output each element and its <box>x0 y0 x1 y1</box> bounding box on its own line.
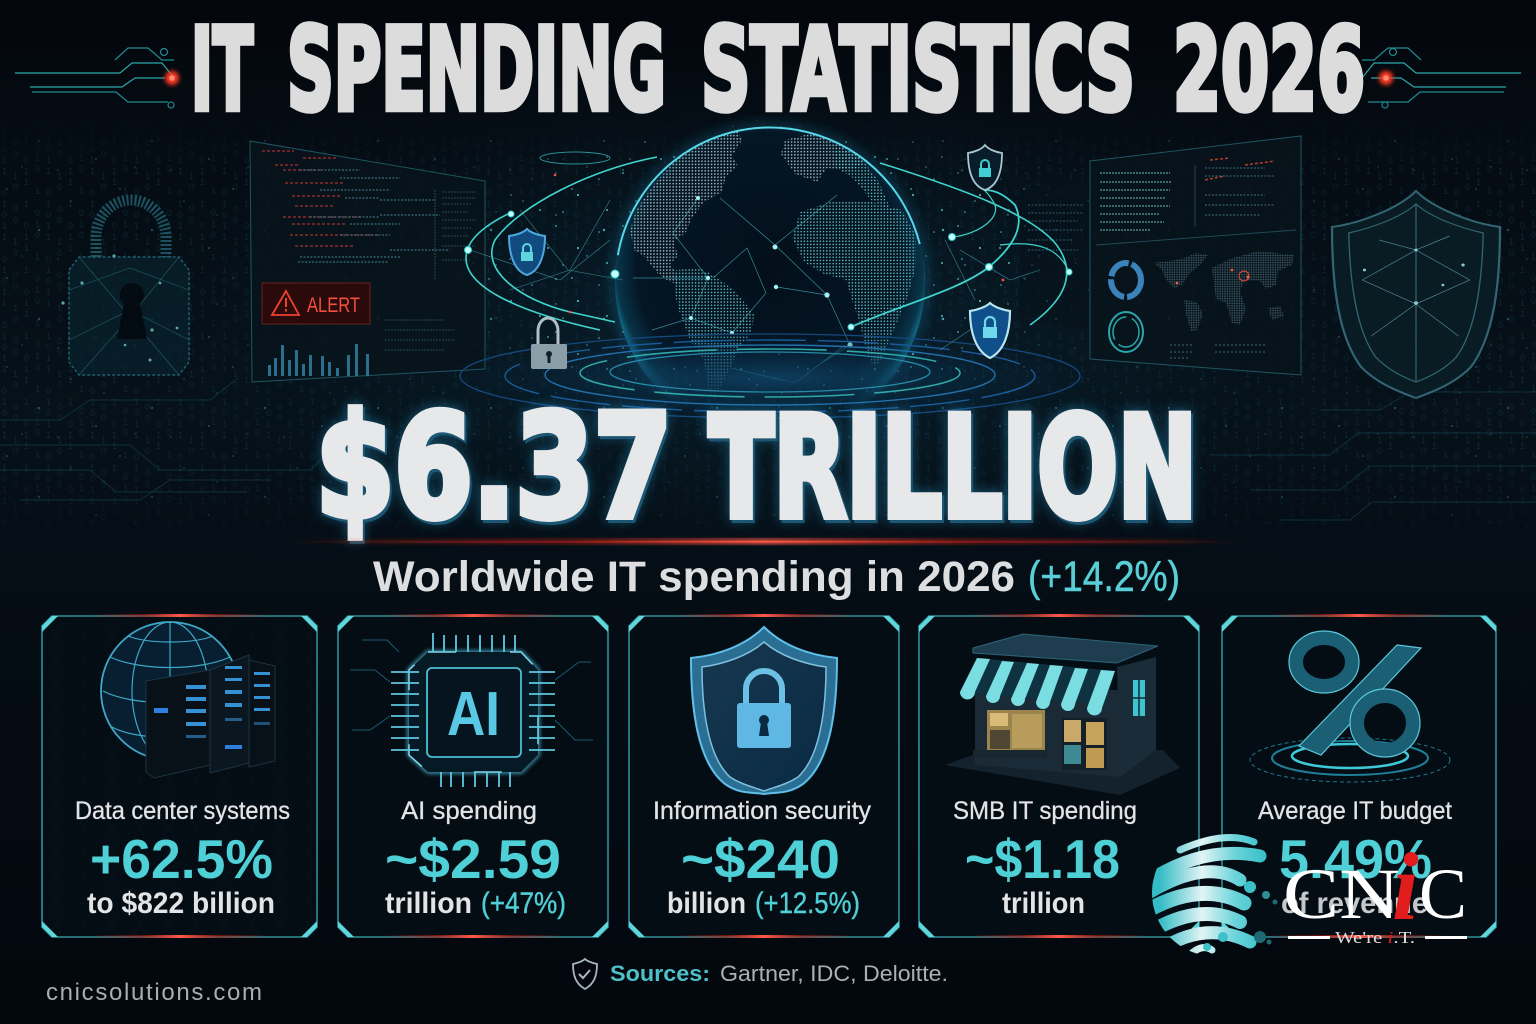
network lines <box>615 194 925 384</box>
website: cnicsolutions.com <box>46 979 262 1006</box>
icon: AI chip: AI <box>447 680 500 749</box>
headline figure: $6.37 <box>318 388 674 553</box>
donut gauge <box>1111 263 1141 297</box>
orbit rings <box>464 152 1072 350</box>
card: information security: ~$240 <box>681 828 840 890</box>
logo tagline <box>1288 928 1467 947</box>
logo sphere <box>1145 838 1278 960</box>
icon: shop front <box>945 634 1180 795</box>
headline figure: TRILLION <box>711 390 1199 552</box>
red divider glow <box>290 539 1240 544</box>
card: data center systems <box>42 614 317 938</box>
card: information security <box>629 614 899 938</box>
greenland / europe <box>781 134 866 182</box>
background shield icon <box>1332 191 1500 398</box>
card: AI spending: (+47%) <box>481 887 566 920</box>
mini bar chart <box>268 344 369 376</box>
card: information security: billion <box>667 887 746 920</box>
icon: shield with padlock <box>691 627 837 794</box>
small shield icon: bottom <box>970 303 1010 358</box>
title ornament: right circuit <box>1362 48 1521 108</box>
card: data center systems: +62.5% <box>90 828 273 890</box>
card: average IT budget: 5.49% <box>1279 828 1432 890</box>
alert badge <box>262 283 370 324</box>
dark world map <box>1154 251 1294 331</box>
icon: check shield <box>573 959 597 989</box>
africa <box>792 202 916 366</box>
card: SMB IT spending: trillion <box>1002 887 1085 920</box>
card: information security: (+12.5%) <box>755 887 860 920</box>
card: average IT budget: Average IT budget <box>1258 797 1452 825</box>
card: AI spending: AI spending <box>401 797 537 825</box>
title <box>191 4 1365 136</box>
card: data center systems: Data center systems <box>75 797 290 825</box>
headline figure: TRILLION <box>709 387 1197 549</box>
card: AI spending: ~$2.59 <box>385 828 561 890</box>
subtitle: Worldwide IT spending in 2026 <box>373 553 1015 601</box>
card: average IT budget: of revenue <box>1281 887 1428 920</box>
card: SMB IT spending: ~$1.18 <box>965 828 1120 890</box>
title ornament: left circuit <box>15 48 179 108</box>
sources line <box>573 959 948 989</box>
globe <box>606 118 934 402</box>
title: STATISTICS <box>701 4 1135 136</box>
code lines <box>262 151 476 350</box>
icon: globe and server racks <box>101 622 275 778</box>
card: SMB IT spending <box>919 614 1199 938</box>
ring gauge <box>1109 312 1143 352</box>
left code panel <box>250 141 485 382</box>
sources line: Sources: <box>610 961 710 986</box>
logo wordmark <box>1283 833 1467 940</box>
headline figure <box>316 385 1199 553</box>
logo wordmark: C <box>1419 854 1467 934</box>
card: AI spending <box>338 614 608 938</box>
icon: percent sign on rings <box>1250 631 1450 782</box>
small metal padlock icon <box>531 318 567 369</box>
card: average IT budget <box>1222 614 1496 938</box>
right dashboard panel <box>1020 136 1301 375</box>
icon: AI chip <box>350 633 593 787</box>
background padlock icon <box>61 200 189 375</box>
headline figure: TRILLION <box>709 387 1197 549</box>
sources line: Gartner, IDC, Deloitte. <box>720 961 948 986</box>
card: information security: Information security <box>653 797 871 825</box>
card: data center systems: to $822 billion <box>87 887 275 920</box>
headline figure: $6.37 <box>316 385 672 550</box>
north america <box>628 128 742 284</box>
small shield icon: left <box>509 229 545 275</box>
card: AI spending: trillion <box>385 887 472 920</box>
logo wordmark: CN <box>1283 854 1400 934</box>
title: SPENDING <box>287 4 666 136</box>
logo wordmark: i <box>1392 833 1419 940</box>
background <box>0 112 1536 586</box>
title: 2026 <box>1173 4 1365 136</box>
logo tagline: We're i.T. <box>1335 928 1415 947</box>
headline figure: $6.37 <box>316 385 672 550</box>
alert badge: ALERT <box>307 294 360 317</box>
card: SMB IT spending: SMB IT spending <box>953 797 1137 825</box>
title: IT <box>191 4 253 136</box>
subtitle: (+14.2%) <box>1028 553 1180 601</box>
logo: CNiC <box>1145 833 1467 960</box>
small shield icon: top <box>968 145 1002 190</box>
holographic ring platform <box>430 332 1110 424</box>
south america <box>674 268 754 400</box>
